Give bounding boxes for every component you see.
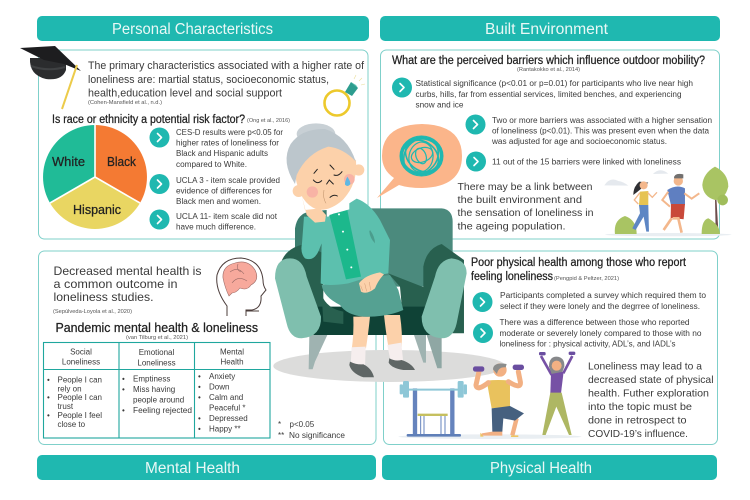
header: Mental Health: Mental Health	[145, 460, 240, 477]
text: possible link: There may be a link between	[458, 181, 593, 193]
icon: chevron 1	[392, 78, 412, 98]
text: UCLA 3 result	[176, 176, 280, 206]
legend: significance: **	[278, 431, 284, 440]
panel: built environment	[380, 50, 720, 239]
panel: physical health	[384, 251, 718, 444]
woman jogger	[632, 181, 657, 232]
column: emotional loneliness: Emptiness	[133, 374, 170, 384]
column: social loneliness: People I can	[58, 393, 102, 402]
text: two or more barriers: was adjusted for age and socioeconomic status.	[491, 137, 667, 146]
text: physical health conclusion: done in retrospect to	[588, 414, 687, 426]
column: emotional loneliness: Miss having	[133, 385, 175, 394]
text: UCLA 11 result	[176, 212, 278, 232]
header: Built Environment: Built Environment	[485, 21, 609, 38]
text: difference: There was a difference between those who reported	[500, 318, 690, 327]
text: two or more barriers: of loneliness (p<0.01). This was present even when the data	[492, 126, 710, 136]
legend: significance: *	[278, 420, 281, 429]
citation: Sepulveda-Loyola: (Sepúlveda-Loyola et al., 2020)	[53, 309, 132, 315]
icon: diamond ring	[324, 75, 365, 116]
illustration: people jogging outdoors	[604, 167, 732, 236]
text: physical health conclusion: into the topic must be	[588, 401, 692, 413]
column: mental health: •	[198, 372, 201, 381]
text: possible link: the sensation of loneliness in	[458, 207, 594, 219]
column: emotional loneliness: Emotional	[139, 348, 175, 357]
icon: graduation cap	[20, 46, 81, 109]
column: emotional loneliness: Feeling rejected	[133, 406, 192, 415]
man jogger	[662, 174, 699, 233]
panel: personal characteristics	[38, 50, 368, 239]
man lifting dumbbells	[473, 363, 524, 437]
text: UCLA 3 result: evidence of differences for	[176, 186, 272, 196]
panel: mental health	[38, 251, 376, 444]
illustration: seated woman in armchair	[273, 123, 505, 382]
column: social loneliness: •	[47, 411, 50, 420]
column: emotional loneliness: Loneliness	[137, 358, 176, 368]
text: CES-D result: CES-D results were p<0.05 for	[176, 128, 283, 137]
text: CES-D result: Black and Hispanic adults	[176, 149, 268, 158]
icon: chevron 3	[150, 210, 170, 230]
column: mental health: Depressed	[209, 414, 248, 423]
text block: decreased mental health: Decreased mental health is	[54, 264, 202, 278]
column: emotional loneliness	[122, 348, 192, 415]
pie chart: race and ethnicity: White	[52, 155, 85, 169]
pie chart: race and ethnicity: Black	[107, 155, 137, 169]
column: emotional loneliness: •	[122, 385, 125, 394]
column: emotional loneliness: people around	[133, 396, 184, 404]
text: CES-D result	[176, 128, 283, 169]
column: social loneliness: trust	[58, 402, 74, 411]
heading: poor physical health: (Pengpid & Peltzer, 2021)	[554, 276, 619, 282]
column: mental health: Down	[209, 382, 229, 392]
column: mental health: •	[198, 424, 201, 434]
text: UCLA 11 result: UCLA 11- item scale did not	[176, 212, 278, 221]
text: statistical significance: curbs, hills, far from essential services, limited benches, and experiencing	[416, 90, 682, 99]
text: survey: select if they were lonely and the degrree of loneliness.	[500, 302, 700, 311]
text: statistical significance	[416, 79, 693, 110]
text: UCLA 3 result: UCLA 3 - item scale provided	[176, 176, 280, 185]
column: social loneliness: Loneliness	[62, 358, 100, 366]
column: mental health: Mental	[220, 348, 244, 356]
text: survey: Participants completed a survey which required them to	[500, 291, 707, 300]
text: physical health conclusion: decreased state of physical	[588, 374, 714, 386]
column: mental health: •	[198, 393, 201, 402]
icon: chevron 3	[466, 152, 486, 172]
column: mental health: Peaceful *	[209, 404, 245, 412]
text: eleven of fifteen barriers: 11 out of the 15 barriers were linked with loneliness	[492, 158, 681, 166]
citation: Rantakokko: (Rantakokko et al., 2014)	[517, 67, 580, 73]
text block: primary characteristics: health,education level and social support	[88, 88, 282, 100]
header: Physical Health: Physical Health	[490, 460, 592, 477]
text: physical health conclusion: health. Futher exploration	[588, 388, 709, 400]
legend: significance: No significance	[289, 431, 346, 440]
text block: decreased mental health: loneliness studies.	[54, 290, 154, 304]
column: social loneliness: People I feel	[58, 411, 102, 420]
column: social loneliness: close to	[58, 420, 86, 429]
text: difference	[500, 318, 702, 348]
icon: speech bubble with scribble	[377, 124, 462, 198]
column: social loneliness	[47, 348, 102, 429]
citation: Cohen-Mansfield: (Cohen-Mansfield et al., n.d.)	[88, 100, 162, 106]
icon: head with brain	[217, 258, 266, 316]
text: CES-D result: higher rates of loneliness for	[176, 138, 279, 148]
icon: chevron 2	[473, 323, 493, 343]
icon: chevron 2	[150, 174, 170, 194]
column: mental health: Calm and	[209, 393, 243, 402]
text: UCLA 3 result: Black men and women.	[176, 197, 261, 206]
table: pandemic loneliness measures	[44, 342, 270, 438]
text: difference: moderate or severely lonely compared to those with no	[500, 329, 702, 338]
text: CES-D result: compared to White.	[176, 160, 247, 169]
text block: primary characteristics: The primary characteristics associated with a higher rate of	[88, 60, 365, 72]
text block: primary characteristics	[88, 60, 365, 100]
legend: significance	[278, 420, 346, 440]
icon: chevron 1	[150, 128, 170, 148]
subheading: race or ethnicity: Is race or ethnicity a potential risk factor?	[52, 114, 245, 126]
text: two or more barriers	[491, 116, 712, 146]
text block: decreased mental health	[54, 264, 202, 304]
text: survey	[500, 291, 707, 311]
heading: perceived barriers: What are the perceived barriers which influence outdoor mobility?	[392, 55, 705, 67]
text: statistical significance: snow and ice	[416, 100, 464, 110]
column: mental health: •	[198, 414, 201, 423]
illustration: people exercising with weights	[398, 352, 582, 439]
legend: significance: p<0.05	[290, 420, 315, 429]
pie chart: race and ethnicity: Hispanic	[73, 203, 121, 217]
header: Mental Health	[37, 455, 376, 480]
header: Built Environment	[380, 16, 720, 41]
heading: poor physical health	[471, 257, 687, 283]
icon: chevron 1	[472, 292, 492, 312]
woman lifting dumbbells	[539, 352, 575, 435]
column: social loneliness: Social	[70, 348, 92, 356]
icon: barbell rack	[400, 381, 467, 437]
header: Personal Characteristics: Personal Characteristics	[112, 21, 273, 38]
text block: decreased mental health: a common outcome in	[54, 277, 178, 291]
pie chart: race and ethnicity	[43, 125, 147, 229]
text: statistical significance: Statistical significance (p<0.01 or p=0.01) for participants who live near high	[416, 79, 693, 88]
column: emotional loneliness: •	[122, 406, 125, 415]
subheading: pandemic mental health: Pandemic mental health & loneliness	[56, 321, 258, 335]
heading: poor physical health: feeling loneliness	[471, 271, 553, 283]
text: physical health conclusion: COVID-19’s influence.	[588, 428, 688, 440]
header: Personal Characteristics	[37, 16, 369, 41]
column: mental health: Anxiety	[209, 372, 235, 381]
text: physical health conclusion	[588, 360, 714, 440]
citation: Ong: (Ong et al., 2016)	[247, 118, 290, 124]
text: physical health conclusion: Loneliness may lead to a	[588, 360, 702, 372]
column: social loneliness: •	[47, 376, 50, 384]
icon: chevron 2	[466, 114, 486, 134]
citation: van Tilburg: (van Tilburg et al., 2021)	[126, 335, 188, 341]
text block: primary characteristics: loneliness are: martial status, socioeconomic status,	[88, 74, 329, 86]
text: difference: loneliness for : physical activity, ADL’s, and IADL’s	[500, 340, 676, 348]
column: emotional loneliness: •	[122, 374, 125, 384]
heading: poor physical health: Poor physical health among those who report	[471, 257, 687, 269]
text: possible link: the built environment and	[458, 194, 582, 206]
column: mental health: •	[198, 382, 201, 392]
text: possible link	[458, 181, 594, 232]
column: mental health: Health	[220, 358, 244, 366]
column: social loneliness: rely on	[58, 384, 82, 394]
column: mental health	[198, 348, 248, 434]
column: mental health: Happy **	[209, 424, 241, 434]
text: two or more barriers: Two or more barriers was associated with a higher sensation	[492, 116, 712, 125]
text: possible link: the ageing population.	[458, 220, 566, 232]
column: social loneliness: •	[47, 393, 50, 402]
header: Physical Health	[382, 455, 717, 480]
text: UCLA 11 result: have much difference.	[176, 222, 256, 232]
column: social loneliness: People I can	[58, 376, 102, 384]
